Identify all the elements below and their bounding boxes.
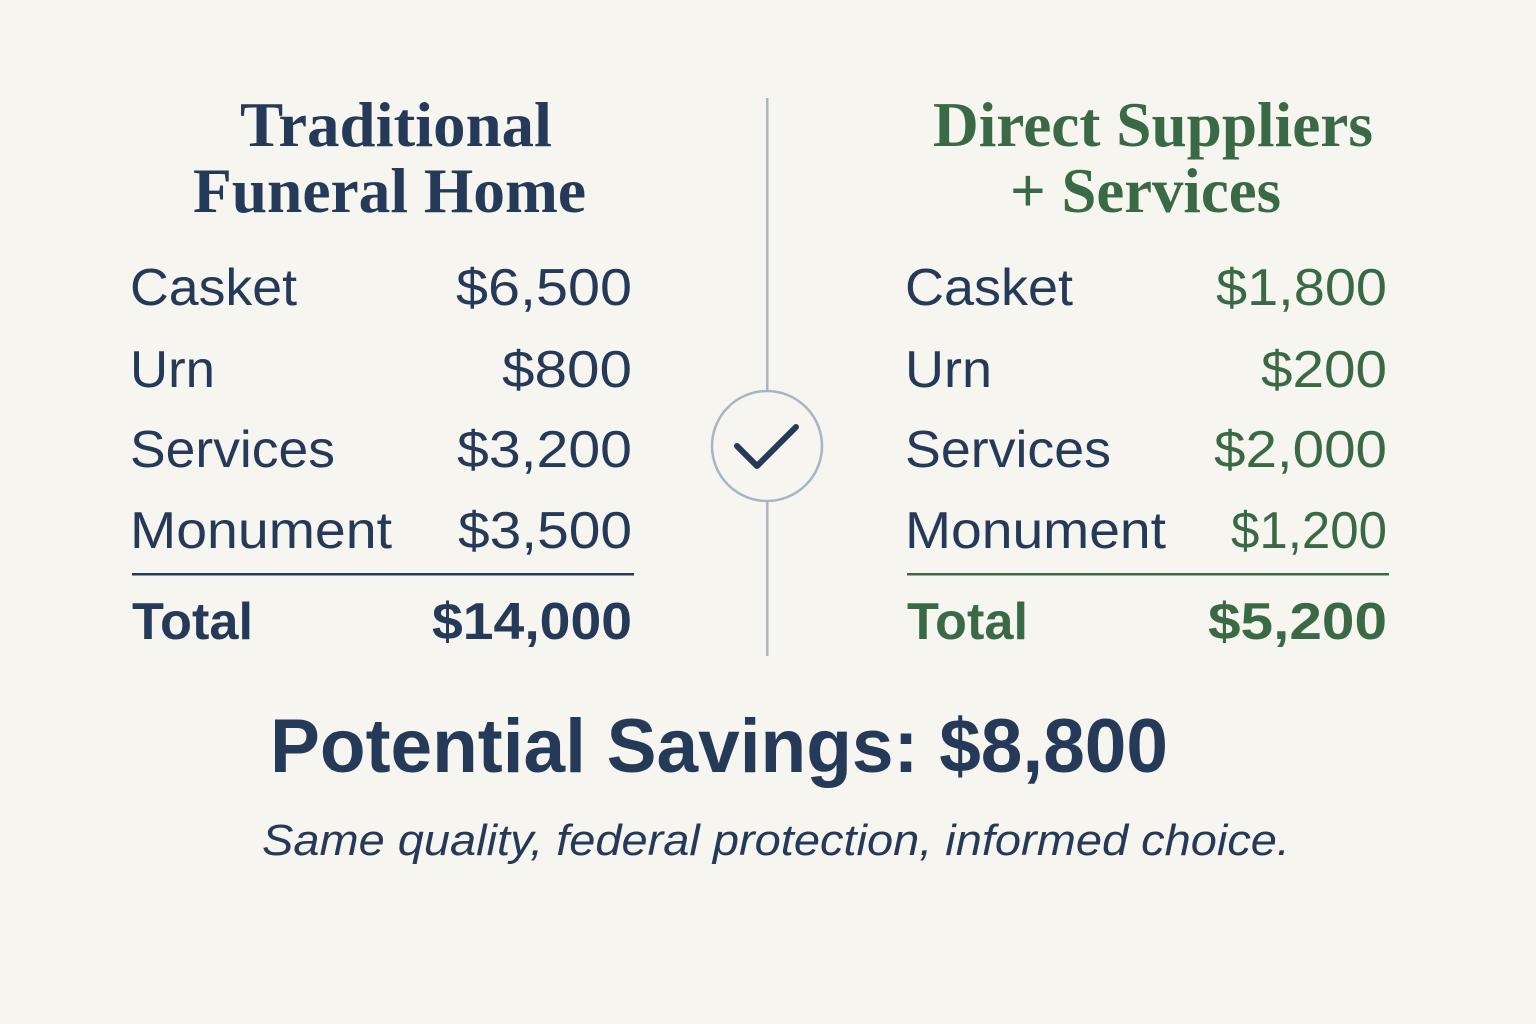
cost rows: traditional: Urn bbox=[130, 341, 215, 399]
cost rows: direct: Urn bbox=[905, 341, 992, 399]
cost rows: traditional: Monument bbox=[130, 502, 393, 560]
cost rows: direct: $2,000 bbox=[1214, 421, 1387, 479]
heading: traditional funeral home: Funeral Home bbox=[193, 155, 586, 226]
cost rows: direct: $1,200 bbox=[1231, 502, 1387, 560]
cost rows: direct: $200 bbox=[1261, 341, 1387, 399]
panel: direct suppliers + services bbox=[905, 89, 1389, 651]
heading: direct suppliers bbox=[933, 89, 1373, 226]
cost rows: direct: $5,200 bbox=[1208, 593, 1387, 651]
cost rows: direct bbox=[905, 259, 1389, 651]
cost rows: traditional: $3,200 bbox=[457, 421, 632, 479]
cost rows: traditional: Total bbox=[132, 593, 253, 651]
headline: potential savings: Potential Savings: $8,800 bbox=[270, 704, 1168, 789]
cost rows: direct: Services bbox=[905, 421, 1111, 479]
cost rows: traditional: $6,500 bbox=[456, 259, 632, 317]
cost rows: traditional: $14,000 bbox=[432, 593, 632, 651]
heading: direct suppliers: Direct Suppliers bbox=[933, 89, 1373, 160]
cost rows: traditional: $800 bbox=[502, 341, 632, 399]
cost rows: traditional: Services bbox=[130, 421, 335, 479]
cost rows: traditional bbox=[130, 259, 634, 651]
heading: direct suppliers: + Services bbox=[1010, 155, 1281, 226]
panel: traditional funeral home bbox=[130, 89, 634, 651]
tagline: Same quality, federal protection, informed choice. bbox=[262, 816, 1290, 865]
cost rows: direct: Total bbox=[907, 593, 1028, 651]
cost rows: direct: Casket bbox=[905, 259, 1074, 317]
heading: traditional funeral home: Traditional bbox=[240, 89, 552, 160]
cost rows: direct: $1,800 bbox=[1216, 259, 1387, 317]
divider with check icon bbox=[712, 98, 822, 656]
cost rows: traditional: Casket bbox=[130, 259, 298, 317]
cost rows: traditional: $3,500 bbox=[458, 502, 632, 560]
cost rows: direct: Monument bbox=[905, 502, 1167, 560]
icon: check circle bbox=[712, 391, 822, 501]
heading: traditional funeral home bbox=[193, 89, 586, 226]
